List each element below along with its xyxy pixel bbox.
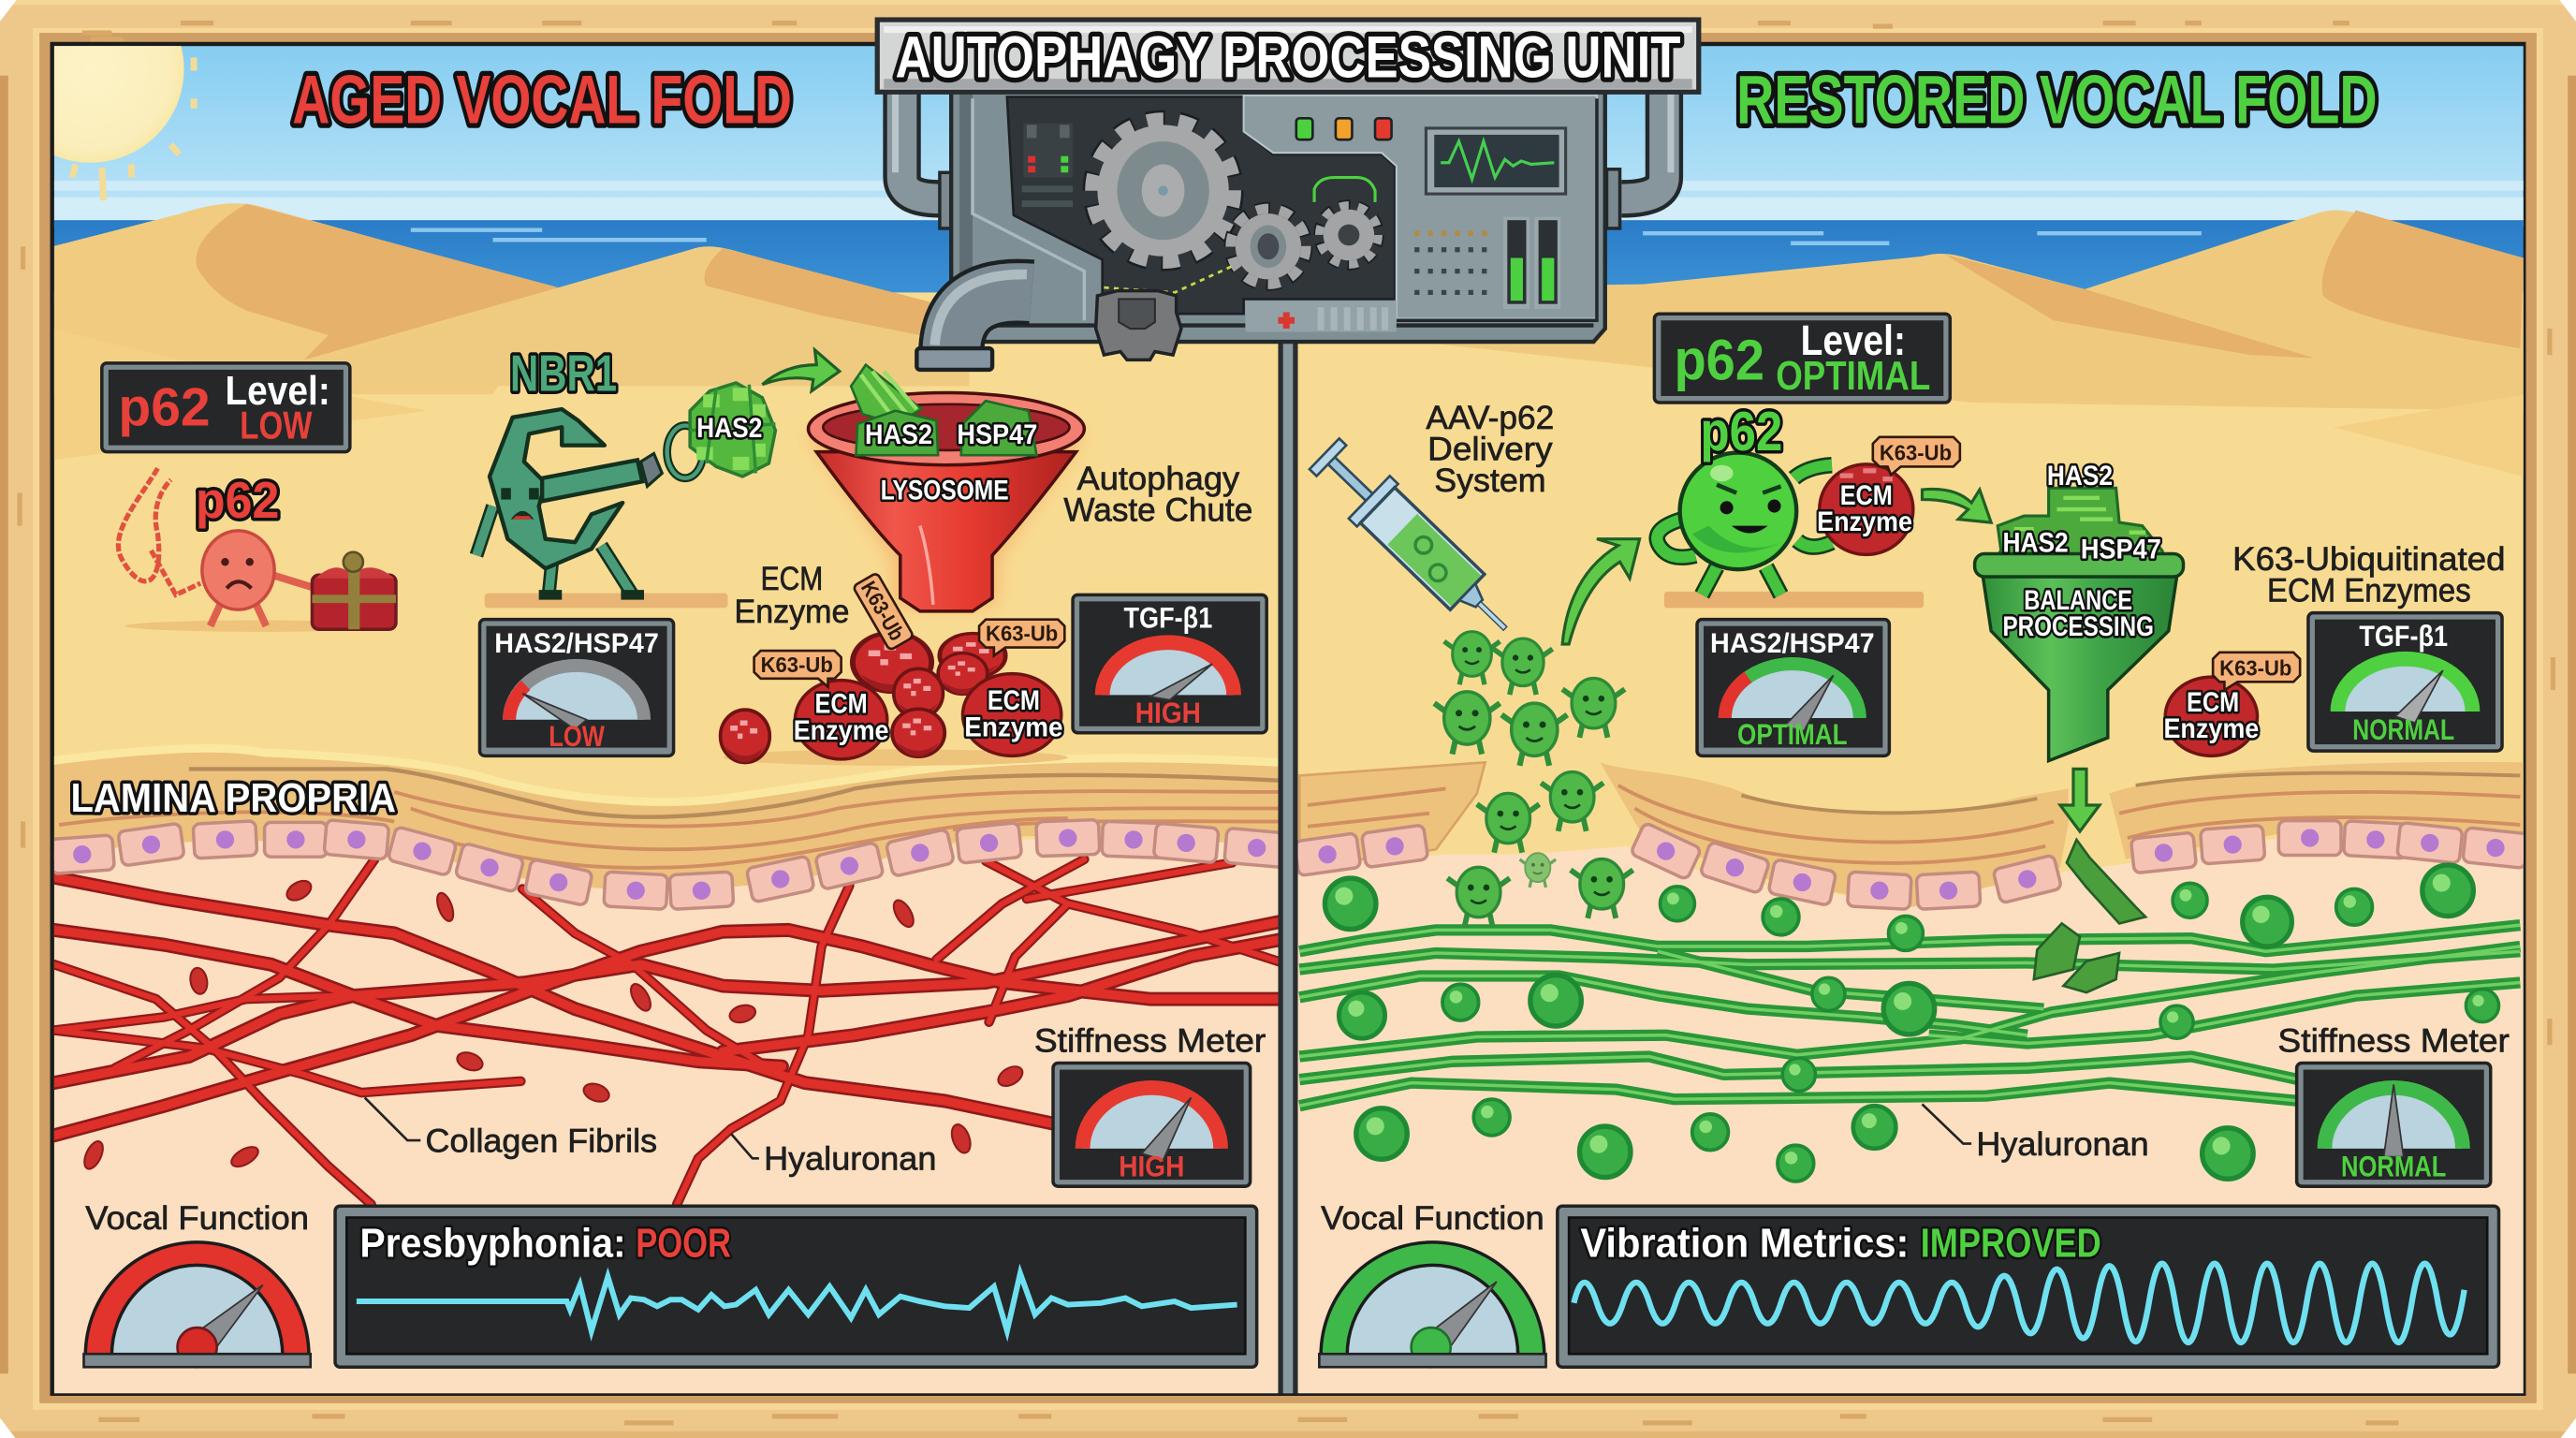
character: weak p62 [118, 468, 396, 632]
icon: sun [54, 46, 198, 200]
gauge: vocal function good: Vocal Function [1321, 1200, 1544, 1237]
centre divider [1278, 337, 1298, 1393]
gauge: HAS2/HSP47 low [479, 620, 674, 756]
enzyme right: Enzyme [964, 712, 1063, 742]
enzyme right [962, 674, 1063, 756]
tag: K63-Ub angled: K63-Ub [856, 577, 910, 645]
loose enzyme [721, 710, 769, 762]
label: HAS2 top: HAS2 [2047, 461, 2113, 492]
cargo HSP47 [957, 401, 1037, 455]
panel: p62 level optimal: Level: [1801, 316, 1906, 364]
panel: vibration metrics waveform [1558, 1206, 2499, 1367]
funnel bowl [1983, 577, 2177, 761]
spout pipe [935, 274, 1032, 352]
gauge: TGF-beta1 normal [2308, 613, 2502, 751]
tag: K63-Ub: K63-Ub [1880, 440, 1952, 464]
arrow: enzyme to balance funnel [1922, 489, 1991, 522]
gauge: vocal function poor: Vocal Function [85, 1200, 309, 1237]
label: HAS2: HAS2 [2002, 528, 2069, 559]
arrow: cargo to lysosome [762, 350, 840, 391]
AAV-p62 delivery label: AAV-p62 [1426, 400, 1554, 436]
lysosome label: LYSOSOME [881, 476, 1009, 506]
status lights [1022, 118, 1392, 204]
gauge: TGF-beta1 high [1073, 594, 1266, 733]
p62 lasso [118, 468, 200, 594]
ECM enzyme held by p62 [1817, 464, 1913, 554]
gauge: stiffness meter high: HIGH [1119, 1150, 1184, 1183]
label: autophagy waste chute [1063, 461, 1252, 528]
gauge: HAS2/HSP47 low: LOW [549, 719, 605, 753]
spout flange [916, 348, 992, 370]
ECM enzyme held by p62: Enzyme [1817, 506, 1912, 537]
ECM enzyme right: Enzyme [2163, 713, 2259, 744]
gauge: stiffness meter high [1034, 1022, 1266, 1186]
panel: p62 level low: Level: [225, 368, 330, 414]
NBR1 arm [542, 460, 642, 501]
cargo HAS2 [856, 411, 938, 455]
panel: presbyphonia waveform: Presbyphonia: [359, 1221, 626, 1267]
indicator dots [1414, 233, 1490, 292]
character: healthy p62 [1657, 400, 1924, 608]
epithelial cell row left [50, 820, 1289, 909]
green cargo pile [1991, 488, 2169, 567]
gauge: vocal function poor [84, 1200, 311, 1367]
gauge: stiffness meter normal: NORMAL [2341, 1150, 2446, 1183]
label: p62: p62 [196, 472, 279, 529]
tag: K63-Ub right: K63-Ub [986, 621, 1058, 645]
bottom vents [1245, 301, 1397, 332]
enzyme right: ECM [988, 685, 1040, 716]
oscilloscope screen [1426, 128, 1566, 194]
label: autophagy waste chute: Autophagy [1076, 461, 1240, 497]
AAV-p62 delivery label: System [1434, 462, 1546, 499]
machine body [951, 85, 1605, 342]
lamina propria tissue right [1298, 762, 2524, 1393]
ECM enzyme pile [721, 573, 1068, 766]
large gear [1091, 119, 1235, 262]
tag: K63-Ub [1873, 437, 1960, 475]
desert and sea background [52, 46, 2524, 859]
right pipe [1606, 94, 1671, 228]
AAV-p62 delivery label [1426, 400, 1554, 499]
hyaluronan droplets right [1325, 865, 2499, 1181]
balance processing funnel [1975, 461, 2184, 761]
NBR1 face [501, 488, 539, 520]
label: hyaluronan left [731, 1134, 936, 1178]
panel: vibration metrics waveform: IMPROVED [1921, 1221, 2101, 1267]
panel: p62 level optimal [1654, 314, 1950, 403]
gauge: stiffness meter high: Stiffness Meter [1034, 1022, 1266, 1059]
central pile [853, 633, 1005, 756]
funnel rim [809, 392, 1084, 465]
panel: p62 level low [102, 363, 350, 452]
gauge: TGF-beta1 high: TGF-β1 [1123, 600, 1212, 634]
gauge: vocal function good [1319, 1200, 1546, 1367]
label: HSP47: HSP47 [2081, 535, 2161, 565]
label: collagen fibrils [365, 1097, 657, 1159]
panel: p62 level low: LOW [240, 404, 313, 448]
heading: autophagy processing unit: AUTOPHAGY PROCESSING UNIT [896, 24, 1680, 90]
waveform improved [1573, 1264, 2465, 1343]
funnel cone [816, 452, 1076, 611]
gauge: TGF-beta1 high: HIGH [1135, 696, 1201, 729]
heading: restored vocal fold: RESTORED VOCAL FOLD [1736, 61, 2378, 139]
label: K63-ubiquitinated ECM enzymes: K63-Ubiquitinated [2232, 541, 2506, 578]
green debris deposits [2034, 840, 2145, 992]
p62 limbs [1657, 465, 1832, 594]
p62 body [1680, 453, 1796, 569]
cargo HAS2: HAS2 [865, 419, 932, 450]
gauge: HAS2/HSP47 optimal: HAS2/HSP47 [1710, 628, 1875, 659]
medium gear [1231, 209, 1306, 285]
panel: presbyphonia waveform: POOR [636, 1221, 731, 1267]
p62 gene particles [1434, 632, 1633, 927]
gauge: TGF-beta1 normal: NORMAL [2352, 712, 2454, 746]
arrow: funnel into tissue [2060, 769, 2100, 831]
panel: p62 level optimal: OPTIMAL [1776, 353, 1930, 399]
level bars [1503, 217, 1560, 309]
tag: K63-Ub right [979, 620, 1064, 655]
heading: aged vocal fold: AGED VOCAL FOLD [292, 61, 792, 139]
hyaluronan fibrils right [1299, 925, 2520, 1106]
gauge: TGF-beta1 normal: TGF-β1 [2359, 619, 2448, 653]
NBR1 body [490, 409, 622, 568]
ECM enzyme held by p62: ECM [1840, 480, 1893, 511]
gauge: HAS2/HSP47 optimal: OPTIMAL [1737, 717, 1848, 751]
tag: K63-Ub right [2213, 653, 2300, 690]
lamina propria tissue left [52, 745, 1278, 1393]
arrow: particles to p62 [1562, 539, 1640, 644]
character: NBR1 [476, 345, 728, 608]
bottom gear [1096, 291, 1181, 360]
label: autophagy waste chute: Waste Chute [1063, 492, 1252, 528]
autophagy machine [896, 85, 1671, 370]
HAS2 cargo cluster [690, 383, 775, 477]
HAS2 cargo cluster: HAS2 [696, 413, 762, 444]
asparagus cargo [851, 365, 922, 424]
panel: presbyphonia waveform [335, 1206, 1257, 1367]
NBR1 connector [640, 426, 703, 487]
label: lamina propria: LAMINA PROPRIA [70, 775, 396, 821]
enzyme left: Enzyme [794, 715, 889, 746]
tag: K63-Ub left [754, 651, 842, 687]
label: ECM enzyme: ECM [761, 561, 823, 597]
wiring [1104, 266, 1232, 292]
gift box [312, 552, 396, 629]
cargo HSP47: HSP47 [957, 419, 1037, 450]
p62 face [1717, 485, 1781, 534]
lysosome funnel [807, 365, 1084, 611]
enzyme left [794, 681, 889, 759]
ECM enzyme right: ECM [2187, 687, 2239, 718]
label: balance processing: BALANCE [2024, 585, 2132, 616]
label: balance processing: PROCESSING [2002, 611, 2154, 642]
label: collagen fibrils: Collagen Fibrils [426, 1123, 657, 1159]
label: hyaluronan left: Hyaluronan [764, 1141, 936, 1178]
label: p62: p62 [1701, 400, 1782, 462]
title plate [877, 20, 1699, 92]
icon: syringe [1304, 433, 1526, 650]
label: K63-ubiquitinated ECM enzymes: ECM Enzymes [2267, 572, 2471, 609]
label: hyaluronan right [1922, 1104, 2149, 1163]
label: ECM enzyme [735, 561, 849, 630]
waveform poor [357, 1273, 1237, 1331]
collagen fibrils left [54, 859, 1288, 1204]
ECM enzyme right [2163, 677, 2259, 756]
label: balance processing [2002, 585, 2154, 642]
enzyme left: ECM [815, 689, 868, 720]
NBR1 limbs [476, 506, 644, 594]
gauge: HAS2/HSP47 low: HAS2/HSP47 [494, 628, 659, 659]
label: hyaluronan right: Hyaluronan [1976, 1126, 2149, 1163]
panel: p62 level optimal: p62 [1674, 328, 1764, 392]
AAV-p62 delivery label: Delivery [1427, 431, 1553, 467]
gauge: stiffness meter normal [2277, 1022, 2510, 1186]
epithelial cell rows right [1295, 821, 2528, 909]
small gear [1314, 178, 1379, 265]
label: ECM enzyme: Enzyme [735, 594, 849, 630]
funnel rim [1975, 553, 2184, 577]
label: NBR1: NBR1 [510, 345, 617, 403]
left pipe [896, 94, 953, 228]
label: K63-ubiquitinated ECM enzymes [2232, 541, 2506, 609]
panel: p62 level low: p62 [118, 378, 211, 438]
p62 body [202, 531, 315, 626]
tag: K63-Ub right: K63-Ub [2219, 655, 2291, 680]
gauge: stiffness meter normal: Stiffness Meter [2277, 1022, 2510, 1059]
gauge: HAS2/HSP47 optimal [1697, 620, 1889, 756]
tag: K63-Ub left: K63-Ub [761, 653, 833, 677]
panel: vibration metrics waveform: Vibration Metrics: [1580, 1221, 1909, 1267]
